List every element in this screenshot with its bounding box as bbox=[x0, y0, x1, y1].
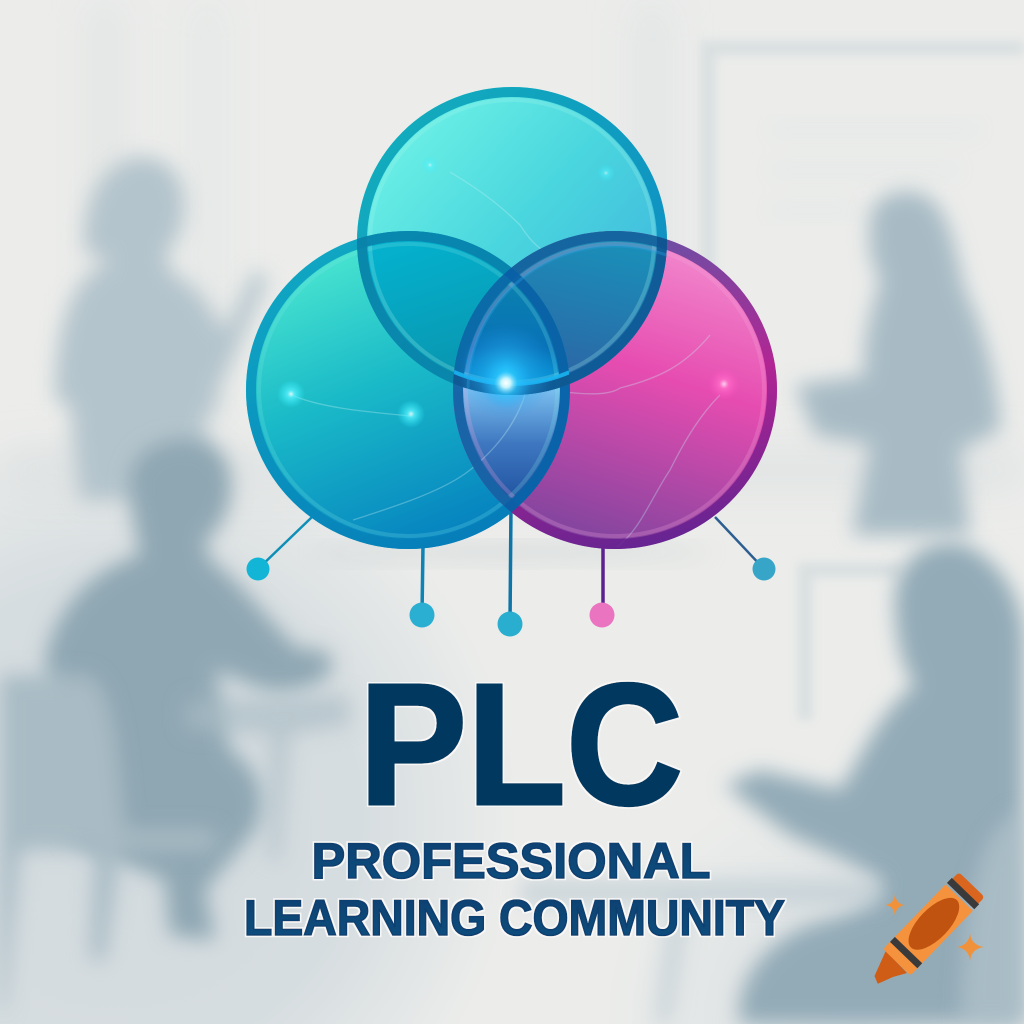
silhouette: standing woman left bbox=[55, 157, 268, 500]
overlap: left and top bbox=[357, 231, 510, 380]
crayon bbox=[864, 871, 985, 996]
overlap: left and right bbox=[453, 384, 570, 504]
sparkle small bbox=[885, 894, 905, 916]
silhouette: desk right bbox=[520, 810, 1024, 1024]
inner rings bbox=[259, 100, 764, 536]
circle: right bbox=[453, 231, 777, 549]
soft shadow bbox=[312, 542, 712, 562]
venn diagram bbox=[246, 87, 777, 636]
bright inner band in centre lens bbox=[454, 244, 666, 389]
sparkle large bbox=[957, 933, 984, 961]
node: left bbox=[410, 545, 434, 628]
silhouette: standing woman right bbox=[795, 191, 1000, 535]
node: center bbox=[498, 505, 522, 636]
silhouette: seated man left bbox=[45, 439, 332, 940]
glow nodes bbox=[277, 156, 740, 428]
node: far right bbox=[715, 517, 776, 580]
subtitle: professional: PROFESSIONAL bbox=[312, 833, 710, 889]
silhouette: chair and table left bbox=[0, 675, 350, 1010]
node: far left bbox=[246, 517, 312, 580]
overlap: right and top bbox=[512, 231, 667, 384]
network lines bbox=[292, 172, 720, 547]
subtitle: learning community: LEARNING COMMUNITY bbox=[244, 890, 785, 946]
connector nodes bbox=[246, 505, 776, 636]
ring crossings bbox=[357, 231, 667, 512]
outer rings bbox=[251, 92, 772, 544]
icon: crayon with sparkles bbox=[864, 871, 985, 996]
glow: small points bbox=[421, 156, 439, 174]
overlaps bbox=[357, 231, 667, 504]
circle: left bbox=[246, 231, 570, 549]
circle fills bbox=[246, 87, 777, 549]
glow: centre bbox=[458, 324, 554, 420]
circle: top bbox=[357, 87, 667, 395]
silhouette: seated woman right bbox=[725, 543, 1024, 1024]
overlap: centre bbox=[464, 281, 559, 390]
title: PLC: PLC bbox=[359, 647, 683, 841]
node: right bbox=[590, 545, 614, 628]
